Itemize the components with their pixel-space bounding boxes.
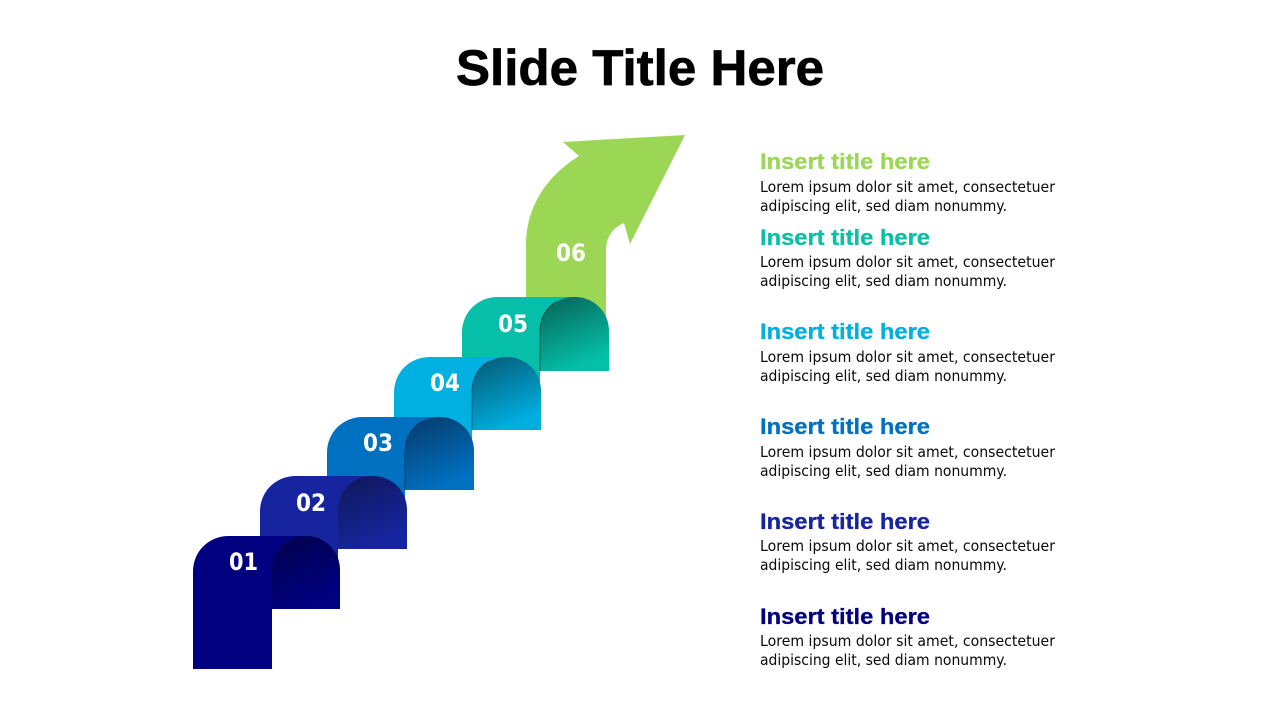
- step 02: indigo fold: 02: [296, 489, 326, 517]
- item 02 text: adipiscing elit, sed diam nonummy.: [760, 556, 1007, 574]
- step 04: sky blue fold: [394, 357, 541, 490]
- step 06: green arrow: [526, 135, 685, 330]
- item 02 text: [760, 509, 1056, 574]
- step 05: teal fold: [462, 297, 609, 430]
- step 06: green arrow: 06: [556, 239, 586, 267]
- item 06 text: adipiscing elit, sed diam nonummy.: [760, 197, 1007, 215]
- item 03 text: [760, 414, 1056, 480]
- step 04: sky blue fold: 04: [430, 369, 460, 397]
- item 06 text: Lorem ipsum dolor sit amet, consectetuer: [760, 178, 1056, 196]
- step 03: blue fold: [327, 417, 474, 549]
- step 03: blue fold: 03: [363, 429, 393, 457]
- item 01 text: Lorem ipsum dolor sit amet, consectetuer: [760, 632, 1056, 650]
- item 03 text: adipiscing elit, sed diam nonummy.: [760, 462, 1007, 480]
- item 04 text: Insert title here: [760, 319, 930, 344]
- item 02 text: Lorem ipsum dolor sit amet, consectetuer: [760, 537, 1056, 555]
- item 03 text: Insert title here: [760, 414, 930, 439]
- step 02: indigo fold: [260, 476, 407, 609]
- item 06 text: Insert title here: [760, 149, 930, 174]
- text list: [760, 149, 1056, 669]
- item 06 text: [760, 149, 1056, 215]
- item 01 text: [760, 604, 1056, 669]
- item 04 text: Lorem ipsum dolor sit amet, consectetuer: [760, 348, 1056, 366]
- item 05 text: Insert title here: [760, 225, 930, 250]
- item 01 text: adipiscing elit, sed diam nonummy.: [760, 651, 1007, 669]
- item 05 text: Lorem ipsum dolor sit amet, consectetuer: [760, 253, 1056, 271]
- title: Slide Title Here: [456, 40, 824, 96]
- item 03 text: Lorem ipsum dolor sit amet, consectetuer: [760, 443, 1056, 461]
- step 01: navy fold: [193, 536, 340, 669]
- item 05 text: adipiscing elit, sed diam nonummy.: [760, 272, 1007, 290]
- arrow chart: six rising steps: [193, 135, 685, 669]
- item 02 text: Insert title here: [760, 509, 930, 534]
- item 04 text: [760, 319, 1056, 385]
- step 01: navy fold: 01: [229, 548, 258, 576]
- item 05 text: [760, 225, 1056, 290]
- item 04 text: adipiscing elit, sed diam nonummy.: [760, 367, 1007, 385]
- item 01 text: Insert title here: [760, 604, 930, 629]
- step 05: teal fold: 05: [498, 310, 528, 338]
